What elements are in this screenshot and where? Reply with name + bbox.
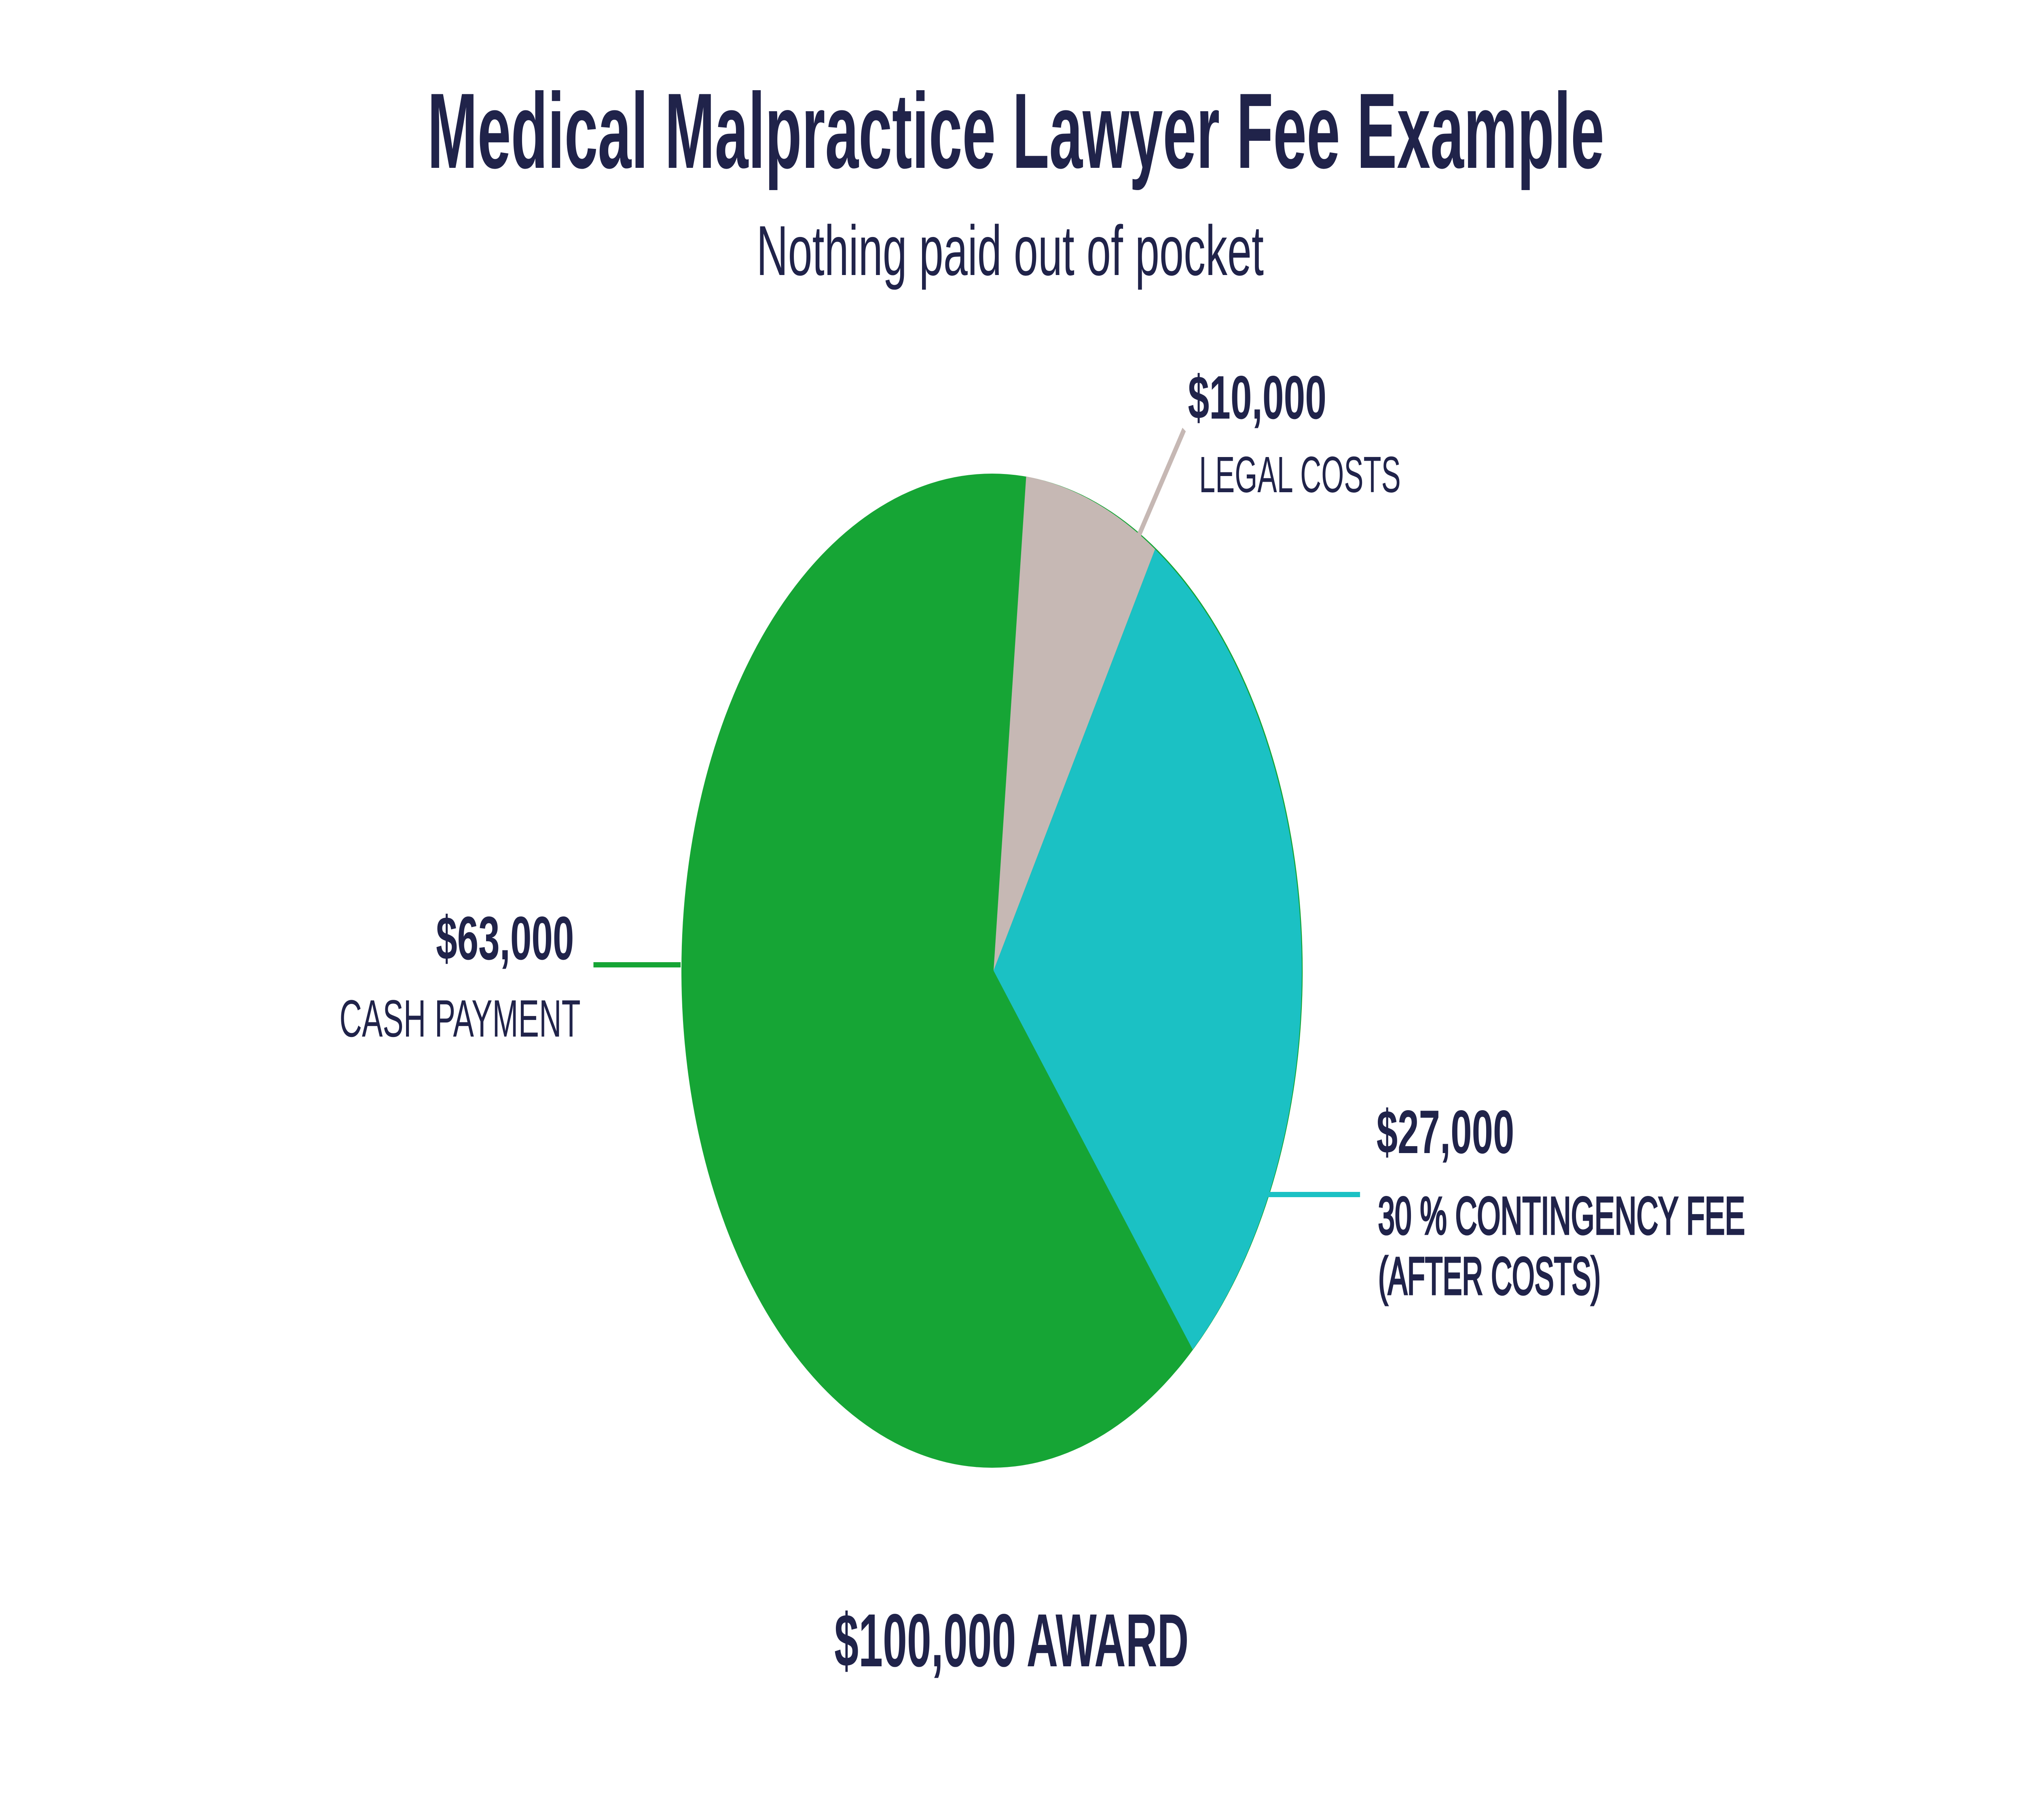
label: legal costs: $10,000 (1188, 363, 1326, 432)
label: contingency fee: (AFTER COSTS) (1378, 1246, 1601, 1306)
label: legal costs (1139, 363, 1401, 536)
slice: contingency fee (994, 549, 1302, 1350)
label: legal costs: LEGAL COSTS (1199, 447, 1401, 504)
slice: legal costs (994, 476, 1155, 971)
label: contingency fee (1264, 1097, 1745, 1306)
leader line: cash payment (594, 962, 681, 967)
label: cash payment: $63,000 (436, 904, 574, 972)
label: cash payment: CASH PAYMENT (339, 989, 581, 1048)
label: cash payment (339, 904, 681, 1048)
pie chart (681, 474, 1303, 1468)
title: Medical Malpractice Lawyer Fee Example (427, 71, 1604, 190)
label: contingency fee: 30 % CONTINGENCY FEE (1378, 1186, 1745, 1246)
label: contingency fee: $27,000 (1377, 1097, 1514, 1166)
subtitle: Nothing paid out of pocket (757, 211, 1264, 290)
total award: $100,000 AWARD (834, 1598, 1189, 1682)
leader line: contingency fee (1264, 1192, 1360, 1197)
slice: cash payment (681, 474, 1303, 1468)
leader line: legal costs (1139, 430, 1184, 536)
